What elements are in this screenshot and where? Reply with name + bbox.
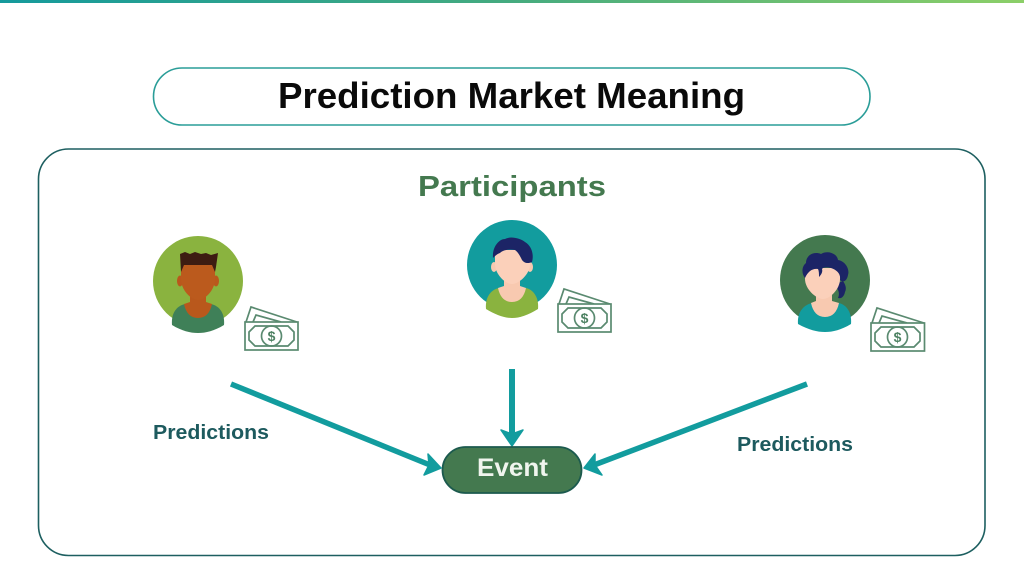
- event label: Event: [477, 454, 549, 482]
- event pill: [442, 447, 582, 493]
- label: predictions left: Predictions: [153, 422, 269, 444]
- heading: Participants: Participants: [418, 171, 606, 203]
- icon: cash left: [245, 307, 298, 350]
- label: predictions right: Predictions: [737, 434, 853, 456]
- arrow: right to event: [584, 384, 807, 475]
- avatar: right participant: [780, 235, 870, 332]
- title pill: [154, 68, 870, 125]
- top gradient bar: [0, 0, 1024, 3]
- icon: cash right: $: [894, 329, 902, 345]
- panel: participants: [38, 149, 985, 556]
- title: Prediction Market Meaning: [278, 75, 745, 116]
- avatar: left participant: [153, 236, 243, 333]
- icon: cash left: $: [268, 328, 276, 344]
- icon: cash center: [558, 289, 611, 332]
- icon: cash right: [871, 308, 924, 351]
- arrow: left to event: [231, 384, 441, 475]
- icon: cash center: $: [581, 310, 589, 326]
- avatar: center participant: [467, 220, 557, 318]
- arrow: center to event: [501, 369, 523, 446]
